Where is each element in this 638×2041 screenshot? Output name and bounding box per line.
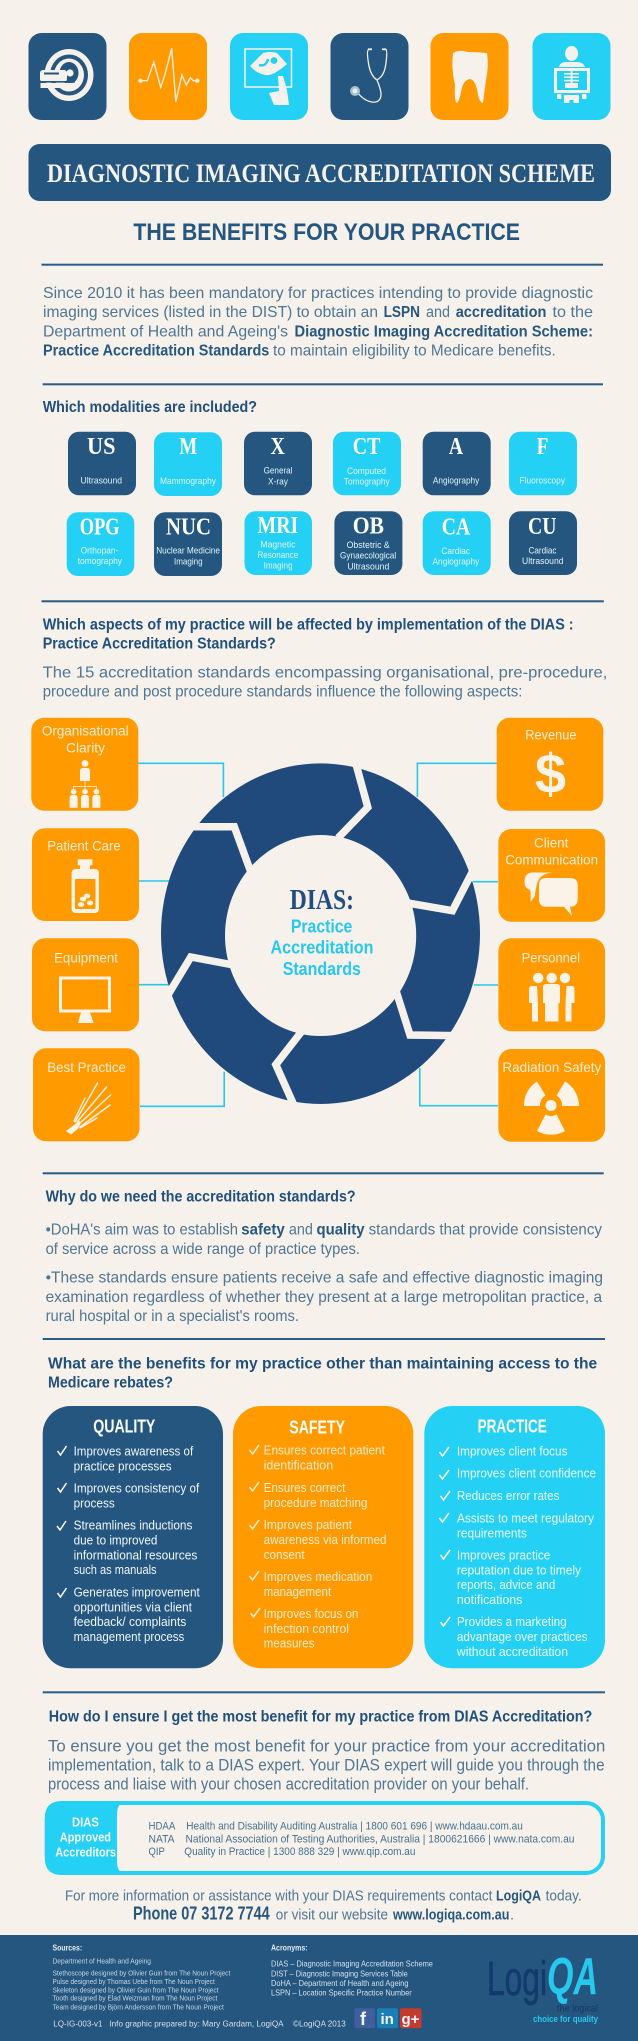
center label	[270, 885, 374, 979]
footer	[0, 1935, 638, 2041]
text: standards intro: procedure and post procedure standards influence the following aspects:	[43, 684, 522, 701]
panel: safety: Improves focus on	[264, 1607, 358, 1621]
tile: F: F	[537, 434, 548, 460]
text: why paragraphs	[46, 1222, 603, 1325]
tile: OB: OB	[353, 514, 384, 540]
sources: Stethoscope designed by Olivier Guin from The Noun Project	[52, 1970, 230, 1977]
box: Client Communication: Client	[534, 835, 569, 851]
tile: CU: Ultrasound	[522, 556, 564, 567]
panel: quality: management process	[74, 1630, 184, 1644]
panel: quality: Streamlines inductions	[74, 1518, 192, 1532]
intro paragraph: Practice Accreditation Standards	[43, 343, 269, 360]
panel: safety: identification	[264, 1459, 333, 1473]
sources: Team designed by Björn Andersson from The Noun Project	[52, 2004, 224, 2011]
panel: safety: procedure matching	[264, 1496, 367, 1510]
accreditor list: National Association of Testing Authorities, Australia | 1800621666 | www.nata.com.au	[186, 1833, 574, 1845]
icon: radiation	[524, 1082, 579, 1135]
accreditors label: Approved	[60, 1830, 111, 1845]
acronyms: DIST – Diagnostic Imaging Services Table	[271, 1969, 408, 1978]
tile: OB: Gynaecological	[340, 551, 396, 562]
social icons: in	[380, 2011, 394, 2028]
intro paragraph: and	[426, 304, 450, 321]
panel: practice: Improves client confidence	[457, 1467, 596, 1481]
panel: quality: QUALITY	[93, 1416, 155, 1436]
tile: MRI	[244, 511, 312, 575]
tile: CT: CT	[353, 434, 380, 460]
panel: quality: feedback/ complaints	[74, 1615, 186, 1629]
tile: MRI: Resonance	[258, 550, 298, 561]
text: why paragraphs: quality	[316, 1222, 365, 1239]
tile: OB	[334, 511, 402, 575]
icon: monitor	[60, 978, 110, 1023]
intro paragraph: to the	[552, 304, 593, 321]
tile: US	[68, 432, 136, 495]
tile: A: A	[449, 434, 464, 460]
panel: safety	[233, 1406, 413, 1668]
center label: Standards	[283, 959, 361, 979]
acronyms: LSPN – Location Specific Practice Number	[271, 1988, 412, 1997]
tile: M	[154, 432, 222, 496]
icon: dollar: $	[535, 742, 566, 805]
modalities grid	[67, 432, 577, 576]
panel: practice: reputation due to timely	[457, 1563, 582, 1577]
icon: ultrasound screen	[230, 33, 308, 120]
heading: aspects: Practice Accreditation Standards?	[43, 635, 276, 652]
heading: benefits: What are the benefits for my practice other than maintaining access to the	[48, 1355, 598, 1372]
icon: tooth	[430, 33, 508, 120]
sources: Department of Health and Ageing	[52, 1959, 151, 1966]
tile: CT: Computed	[347, 466, 386, 477]
logo: choice for quality	[533, 2014, 599, 2025]
acronyms: DoHA – Department of Health and Ageing	[271, 1979, 408, 1988]
sources: Tooth designed by Elad Weizman from The Noun Project	[52, 1996, 217, 2003]
credit line: Info graphic prepared by: Mary Gardam, LogiQA	[109, 2019, 284, 2029]
tile: CT	[333, 432, 401, 495]
panel: quality	[43, 1406, 223, 1668]
panel: safety: Ensures correct	[264, 1481, 346, 1495]
icon: pulse	[129, 33, 207, 120]
tile: OB: Obstetric &	[347, 540, 390, 551]
heading: aspects: Which aspects of my practice will be affected by implementation of the DIAS :	[43, 616, 574, 633]
title banner	[28, 144, 611, 201]
heading: aspects	[43, 616, 574, 652]
icon: hand skeleton	[68, 1083, 111, 1133]
box: Patient Care	[32, 828, 139, 921]
panel: quality: such as manuals	[74, 1563, 157, 1577]
intro paragraph: imaging services (listed in the DIST) to obtain an	[43, 304, 378, 321]
contact information: .	[510, 1908, 514, 1924]
icon: pill bottle	[72, 859, 99, 913]
accreditors label: Accreditors	[55, 1844, 116, 1859]
logo: Logi	[487, 1953, 547, 2006]
text: standards intro	[43, 665, 607, 701]
social icons: f	[360, 2009, 367, 2029]
box: Revenue	[497, 718, 603, 811]
box: Equipment	[32, 938, 139, 1031]
panel: practice: advantage over practices	[457, 1630, 588, 1644]
center label: DIAS:	[290, 885, 354, 916]
panel: approved accreditors	[45, 1801, 603, 1875]
icon: speech bubbles	[524, 872, 578, 916]
tile: NUC: NUC	[166, 515, 211, 541]
text: why paragraphs: safety	[241, 1222, 285, 1239]
logo	[487, 1948, 599, 2025]
tile: CT: Tomography	[344, 476, 390, 487]
box: Organisational Clarity: Organisational	[42, 723, 129, 739]
tile: US: Ultrasound	[80, 475, 122, 486]
sources	[52, 1944, 230, 2011]
subtitle: THE BENEFITS FOR YOUR PRACTICE	[133, 219, 520, 246]
intro paragraph: Department of Health and Ageing's	[43, 324, 288, 341]
intro paragraph: LSPN	[384, 304, 420, 321]
credit line: ©LogiQA 2013	[293, 2019, 346, 2029]
intro paragraph: to maintain eligibility to Medicare benefits.	[273, 343, 556, 360]
contact information: today.	[546, 1888, 582, 1904]
text: why paragraphs: standards that provide consistency	[369, 1222, 602, 1239]
text: why paragraphs: and	[289, 1222, 313, 1239]
icon: hierarchy	[70, 760, 100, 808]
heading: benefits: Medicare rebates?	[48, 1374, 173, 1391]
accreditor list	[148, 1820, 574, 1858]
panel: quality: Generates improvement	[74, 1586, 200, 1600]
acronyms	[271, 1944, 433, 1997]
contact information: For more information or assistance with your DIAS requirements contact	[65, 1888, 492, 1904]
contact information: Phone 07 3172 7744	[133, 1904, 270, 1924]
text: why paragraphs: of service across a wide range of practice types.	[46, 1241, 360, 1258]
panel: practice: Assists to meet regulatory	[457, 1511, 595, 1525]
box: Organisational Clarity	[31, 718, 138, 811]
tile: CU	[509, 511, 577, 575]
box: Personnel	[498, 938, 605, 1031]
panel: practice: without accreditation	[456, 1645, 568, 1659]
panel: quality: Improves awareness of	[74, 1444, 194, 1458]
panel: practice: notifications	[457, 1593, 522, 1607]
tile: X: General	[264, 466, 292, 477]
panel: quality: informational resources	[74, 1548, 197, 1562]
tile: NUC	[154, 512, 222, 576]
accreditor list: Health and Disability Auditing Australia | 1800 601 696 | www.hdaau.com.au	[186, 1820, 523, 1832]
box: Revenue: Revenue	[525, 726, 577, 742]
panel: practice: PRACTICE	[478, 1416, 547, 1436]
contact information: www.logiqa.com.au	[392, 1907, 509, 1924]
box: Radiation Safety: Radiation Safety	[502, 1059, 601, 1075]
text: how paragraph	[48, 1737, 605, 1794]
panel: quality: practice processes	[74, 1459, 172, 1473]
panel: safety: consent	[264, 1548, 305, 1562]
panel: safety: measures	[264, 1637, 314, 1651]
intro paragraph	[43, 285, 593, 360]
contact information	[65, 1888, 582, 1924]
sources: Skeleton designed by Olivier Guin from The Noun Project	[52, 1987, 219, 1994]
logo: the logical	[557, 2004, 598, 2015]
tile: MRI: Imaging	[264, 561, 292, 572]
tile: M: M	[179, 434, 197, 460]
tile: MRI: MRI	[258, 513, 298, 539]
credit line: LQ-IG-003-v1	[53, 2019, 103, 2029]
tile: CA: Angiography	[432, 557, 480, 568]
heading: modalities: Which modalities are included?	[43, 399, 257, 416]
tile: F	[509, 432, 577, 495]
tile: CU: Cardiac	[528, 545, 557, 556]
accreditor list: Quality in Practice | 1300 888 329 | www.qip.com.au	[184, 1846, 415, 1858]
panel: safety: infection control	[264, 1622, 349, 1636]
box: Personnel: Personnel	[522, 950, 580, 966]
intro paragraph: Diagnostic Imaging Accreditation Scheme:	[294, 324, 593, 341]
text: why paragraphs: •DoHA's aim was to establish	[46, 1222, 238, 1239]
tile: NUC: Imaging	[174, 557, 203, 568]
box: Client Communication: Communication	[505, 852, 598, 868]
box: Organisational Clarity: Clarity	[66, 740, 105, 756]
tile: CU: CU	[528, 514, 556, 540]
panel: quality: Improves consistency of	[74, 1482, 200, 1496]
tile: X: X	[270, 434, 285, 460]
icon: stethoscope	[330, 33, 408, 120]
cycle diagram	[160, 755, 480, 1112]
box: Best Practice: Best Practice	[47, 1059, 126, 1075]
tile: CA: Cardiac	[441, 546, 470, 557]
heading: why: Why do we need the accreditation standards?	[46, 1188, 356, 1205]
tile: CA	[423, 511, 491, 575]
tile: NUC: Nuclear Medicine	[156, 546, 220, 557]
credit line	[53, 2019, 346, 2029]
center label: Practice	[291, 916, 352, 936]
text: why paragraphs: examination regardless of whether they present at a large metropolitan practice, a	[46, 1289, 602, 1306]
panel: practice: requirements	[457, 1526, 527, 1540]
sources: Pulse designed by Thomas Uebe from The Noun Project	[52, 1979, 215, 1986]
panel: safety: Improves medication	[264, 1570, 372, 1584]
heading: benefits	[48, 1355, 598, 1391]
tile: OPG: Orthopan-	[81, 545, 118, 556]
acronyms: DIAS – Diagnostic Imaging Accreditation Scheme	[271, 1960, 433, 1969]
panel: safety: SAFETY	[289, 1418, 345, 1438]
tile: A: Angiography	[433, 476, 480, 487]
accreditors label: DIAS	[72, 1815, 99, 1830]
text: how paragraph: To ensure you get the most benefit for your practice from your accreditation	[48, 1737, 605, 1755]
tile: OPG	[67, 512, 134, 576]
accreditors label	[55, 1815, 116, 1859]
text: why paragraphs: rural hospital or in a specialist's rooms.	[46, 1308, 299, 1325]
panel: quality: due to improved	[74, 1533, 157, 1547]
logo: QA	[547, 1948, 598, 2006]
social icons	[354, 2008, 422, 2029]
panel: safety: awareness via informed	[264, 1533, 387, 1547]
contact information: or visit our website	[276, 1908, 388, 1924]
panel: practice: Improves practice	[457, 1548, 550, 1562]
tile: A	[423, 432, 491, 495]
social icons: g+	[402, 2011, 420, 2028]
icon row	[28, 33, 610, 120]
panel: practice	[424, 1406, 605, 1668]
panel: quality: opportunities via client	[74, 1600, 192, 1614]
panel: quality: process	[74, 1496, 115, 1510]
tile: CA: CA	[442, 515, 471, 541]
connector lines	[138, 763, 498, 1106]
tile: M: Mammography	[160, 476, 216, 487]
intro paragraph: Since 2010 it has been mandatory for practices intending to provide diagnostic	[43, 285, 593, 302]
accreditor list: NATA	[148, 1833, 175, 1845]
text: standards intro: The 15 accreditation standards encompassing organisational, pre-procedure,	[43, 665, 607, 682]
tile: X: X-ray	[268, 476, 288, 487]
tile: OB: Ultrasound	[347, 561, 389, 572]
panel: practice: Reduces error rates	[457, 1489, 559, 1503]
panel: safety: management	[264, 1585, 332, 1599]
sources: Sources:	[52, 1944, 82, 1953]
box: Client Communication	[498, 829, 605, 922]
text: how paragraph: implementation, talk to a DIAS expert. Your DIAS expert will guide you through the	[48, 1756, 605, 1774]
box: Patient Care: Patient Care	[47, 837, 121, 853]
panel: practice: Improves client focus	[457, 1444, 568, 1458]
center label: Accreditation	[270, 938, 374, 958]
tile: US: US	[87, 434, 116, 460]
acronyms: Acronyms:	[271, 1944, 308, 1953]
panel: practice: Provides a marketing	[457, 1615, 567, 1629]
intro paragraph: accreditation	[456, 304, 546, 321]
tile: OPG: tomography	[78, 556, 122, 567]
icon: team	[529, 973, 574, 1022]
icon: MRI scanner	[28, 33, 106, 120]
box: Best Practice	[33, 1048, 140, 1141]
panel: practice: reports, advice and	[457, 1578, 555, 1592]
icon: x-ray figure	[532, 33, 610, 120]
tile: OPG: OPG	[80, 515, 120, 541]
box: Equipment: Equipment	[54, 950, 118, 966]
panel: safety: Improves patient	[264, 1518, 352, 1532]
accreditor list: HDAA	[148, 1820, 176, 1832]
text: how paragraph: process and liaise with your chosen accreditation provider on your behalf.	[48, 1776, 529, 1794]
panel: safety: Ensures correct patient	[264, 1444, 385, 1458]
contact information: LogiQA	[496, 1888, 541, 1904]
tile: X	[244, 432, 312, 495]
heading: how: How do I ensure I get the most benefit for my practice from DIAS Accreditation?	[49, 1709, 592, 1726]
accreditor list: QIP	[148, 1846, 165, 1858]
text: why paragraphs: •These standards ensure patients receive a safe and effective diagnostic imaging	[46, 1270, 603, 1287]
tile: F: Fluoroscopy	[520, 476, 565, 487]
box: Radiation Safety	[498, 1049, 605, 1142]
tile: MRI: Magnetic	[260, 540, 296, 551]
